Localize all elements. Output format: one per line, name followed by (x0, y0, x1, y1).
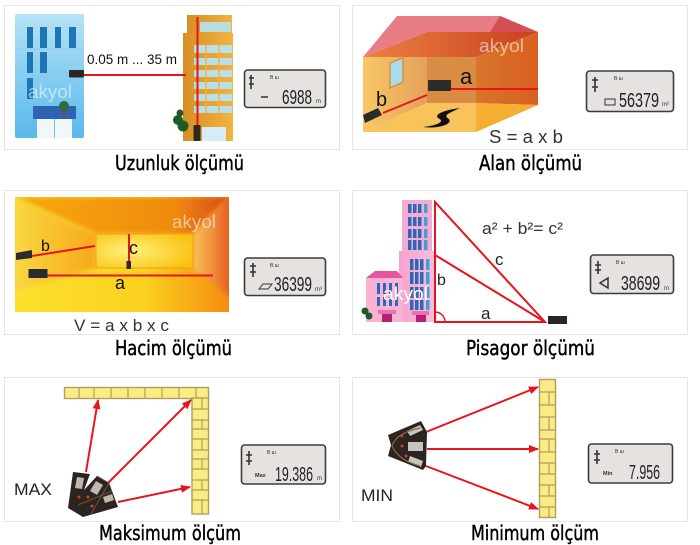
arrow: horizontal laser (84, 74, 186, 76)
panel: area measurement (352, 6, 688, 150)
label a: a (460, 64, 473, 89)
title: pythagoras: Pisagor ölçümü (466, 336, 595, 360)
icon: pink buildings (362, 200, 435, 322)
formula: V = a x b x c (74, 316, 170, 335)
display: pythagoras: 38699 (621, 273, 660, 295)
display: min (588, 444, 672, 484)
label c: c (129, 238, 138, 258)
right-angle mark (435, 312, 445, 322)
panel: minimum measurement (352, 378, 688, 522)
arrow: up (86, 400, 98, 472)
display: min: Min (603, 471, 613, 477)
arrow: right (118, 487, 190, 502)
icon: device c (126, 261, 131, 269)
display: area (586, 71, 674, 112)
display: max: B ш (267, 450, 276, 456)
display: pythagoras (590, 255, 674, 295)
display: min: 7.956 (629, 462, 660, 484)
icon: orange building (173, 15, 233, 141)
arrow: laser b (32, 246, 95, 256)
label c: c (495, 250, 504, 269)
arrow: diagonal (107, 400, 191, 484)
display: area: 56379 (619, 90, 659, 112)
arrow: middle (427, 448, 538, 450)
label MAX: MAX (14, 480, 52, 499)
icon: device b (363, 108, 382, 123)
icon: brick wall (540, 380, 556, 518)
title: area: Alan ölçümü (479, 151, 582, 175)
icon: device horizontal (69, 70, 84, 78)
arrow: vertical laser (196, 17, 198, 127)
label b: b (376, 89, 387, 111)
display: max: 19.386 (275, 464, 313, 486)
display: pythagoras: B ш (616, 260, 625, 266)
icon: devices fan (68, 472, 118, 517)
watermark: akyol (28, 82, 72, 102)
arrow: laser a (450, 88, 538, 90)
title: volume: Hacim ölçümü (115, 336, 232, 360)
icon: devices fan (388, 421, 427, 470)
display: pythagoras: m (664, 286, 669, 292)
arrow: laser c (128, 234, 130, 262)
icon: blue building (15, 14, 84, 138)
icon: brick wall L (64, 388, 208, 514)
triangle: laser lines (435, 202, 545, 322)
icon: device a (428, 80, 451, 91)
title: length: Uzunluk ölçümü (115, 151, 244, 175)
panel: pythagoras measurement (352, 190, 688, 334)
display: max: Max (255, 473, 267, 479)
display: max: m (317, 476, 322, 482)
label b: b (41, 238, 50, 255)
display: area: m² (662, 102, 669, 108)
arrow: laser a (47, 274, 213, 276)
label MIN: MIN (361, 486, 393, 505)
formula: S = a x b (489, 127, 563, 147)
label a: a (115, 273, 126, 293)
display: length: B ш (270, 75, 279, 81)
display: length: m (316, 99, 321, 105)
display: volume: m³ (315, 287, 322, 293)
icon: device b (16, 250, 32, 260)
display: length (244, 70, 326, 109)
display: volume: 36399 (274, 274, 312, 296)
arrow: upper (426, 387, 538, 432)
formula: a² + b²= c² (482, 219, 563, 238)
icon: device (548, 316, 567, 324)
panel: maximum measurement (4, 378, 340, 522)
watermark: akyol (383, 284, 428, 304)
label b: b (437, 272, 446, 289)
display: volume: B ш (270, 263, 279, 269)
watermark: akyol (479, 36, 524, 56)
panel: volume measurement (4, 190, 340, 335)
icon: device a (28, 269, 48, 278)
icon: room with roof (363, 16, 538, 132)
title: maximum: Maksimum ölçüm (99, 521, 241, 545)
display: volume (244, 258, 326, 296)
arrow: laser b (383, 95, 427, 113)
panel: length measurement (4, 6, 340, 150)
title: minimum: Minimum ölçüm (471, 521, 599, 545)
display: area: B ш (614, 76, 623, 82)
arrow: lower (426, 466, 538, 509)
watermark: akyol (172, 212, 216, 232)
icon: room interior (15, 197, 229, 312)
label a: a (481, 304, 491, 323)
display: length: 6988 (282, 87, 312, 109)
icon: device vertical (194, 125, 200, 141)
display: min: B ш (615, 449, 624, 455)
range label: 0.05 m ... 35 m (87, 51, 177, 67)
display: max (242, 445, 326, 486)
